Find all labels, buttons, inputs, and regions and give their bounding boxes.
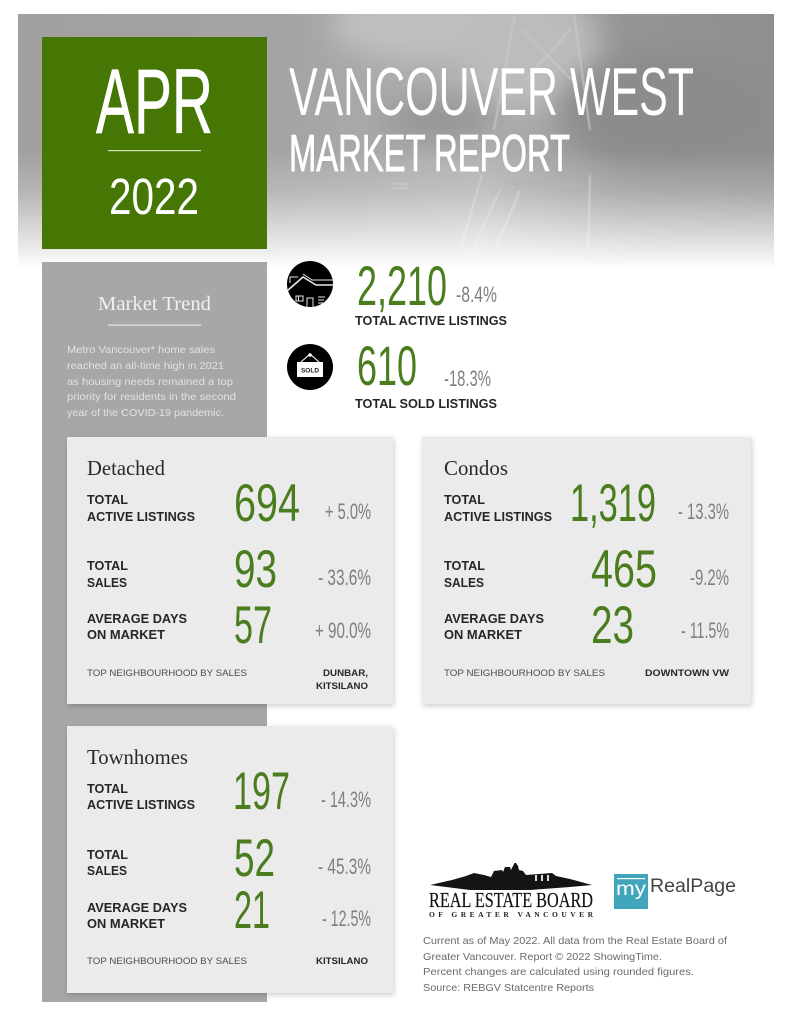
market trend paragraph: Metro Vancouver* home sales: [67, 344, 215, 356]
title: MARKET REPORT: [289, 125, 570, 183]
date box: Apr 2022: [42, 37, 267, 249]
header banner: foggy bridge photo: [18, 0, 780, 267]
townhomes days on market row: AVERAGE DAYS: [87, 901, 187, 915]
panel: condos: [422, 437, 751, 704]
market trend paragraph: [67, 344, 236, 419]
condos active listings row: TOTAL: [444, 493, 485, 507]
townhomes top neighbourhood: KITSILANO: [316, 956, 368, 967]
condos sales row: SALES: [444, 576, 484, 590]
townhomes sales row: - 45.3%: [318, 854, 371, 879]
townhomes top neighbourhood: [87, 956, 368, 967]
condos top neighbourhood: TOP NEIGHBOURHOOD BY SALES: [444, 668, 605, 679]
condos days on market row: [444, 596, 729, 655]
stat: total active listings: -8.4%: [456, 282, 497, 307]
logo: myRealPage: [614, 874, 736, 909]
detached days on market row: AVERAGE DAYS: [87, 612, 187, 626]
market trend paragraph: year of the COVID-19 pandemic.: [67, 407, 224, 419]
detached active listings row: 694: [234, 474, 300, 533]
detached days on market row: 57: [234, 596, 272, 655]
icon: house: [287, 261, 334, 308]
detached sales row: SALES: [87, 576, 127, 590]
condos days on market row: 23: [591, 596, 634, 655]
stat: total sold listings: 610: [357, 334, 417, 397]
condos top neighbourhood: DOWNTOWN VW: [645, 668, 729, 679]
date box: Apr 2022: APR: [96, 51, 213, 153]
logo: Real Estate Board of Greater Vancouver: OF GREATER VANCOUVER: [429, 910, 594, 919]
townhomes sales row: [87, 829, 371, 888]
logo: Real Estate Board of Greater Vancouver: REAL ESTATE BOARD: [429, 888, 593, 912]
sidebar: market trend panel: [42, 262, 267, 1002]
detached active listings row: + 5.0%: [325, 499, 371, 524]
detached sales row: TOTAL: [87, 559, 128, 573]
panel: detached: [67, 437, 393, 704]
footer source note: Current as of May 2022. All data from the Real Estate Board of: [423, 935, 727, 947]
logo: myRealPage: RealPage: [650, 876, 736, 897]
heading: market trend: Market Trend: [98, 293, 211, 315]
condos active listings row: ACTIVE LISTINGS: [444, 510, 552, 524]
stat: total sold listings: [355, 334, 497, 411]
condos top neighbourhood: [444, 668, 729, 679]
icon: sold sign: [287, 344, 333, 390]
condos sales row: -9.2%: [690, 565, 729, 590]
panel: townhomes: [67, 726, 393, 993]
stat: total sold listings: TOTAL SOLD LISTINGS: [355, 397, 497, 411]
townhomes active listings row: [87, 762, 371, 821]
detached sales row: [87, 540, 371, 599]
townhomes active listings row: 197: [233, 762, 290, 821]
condos active listings row: - 13.3%: [678, 499, 729, 524]
detached days on market row: + 90.0%: [315, 618, 371, 643]
stat: total sold listings: -18.3%: [444, 366, 491, 391]
heading: condos: Condos: [444, 456, 508, 480]
heading: townhomes: Townhomes: [87, 745, 188, 769]
heading: detached: Detached: [87, 456, 165, 480]
condos days on market row: ON MARKET: [444, 628, 522, 642]
townhomes days on market row: - 12.5%: [322, 906, 371, 931]
townhomes sales row: SALES: [87, 864, 127, 878]
footer source note: Greater Vancouver. Report © 2022 ShowingTime.: [423, 951, 662, 963]
detached sales row: - 33.6%: [318, 565, 371, 590]
logo: Real Estate Board of Greater Vancouver: [429, 863, 594, 919]
detached top neighbourhood: [87, 668, 368, 692]
condos sales row: TOTAL: [444, 559, 485, 573]
market trend paragraph: priority for residents in the second: [67, 391, 236, 403]
stat: total active listings: 2,210: [357, 254, 447, 317]
market trend paragraph: reached an all-time high in 2021: [67, 360, 224, 372]
townhomes active listings row: - 14.3%: [321, 787, 371, 812]
logo: myRealPage: my: [616, 879, 647, 900]
footer source note: [423, 935, 727, 994]
market trend paragraph: as housing needs remained a top: [67, 376, 233, 388]
icon: sold sign: SOLD: [301, 368, 319, 374]
detached days on market row: ON MARKET: [87, 628, 165, 642]
detached active listings row: TOTAL: [87, 493, 128, 507]
condos active listings row: [444, 474, 729, 533]
condos sales row: [444, 540, 729, 599]
townhomes days on market row: ON MARKET: [87, 917, 165, 931]
footer source note: Percent changes are calculated using rounded figures.: [423, 966, 694, 978]
condos sales row: 465: [591, 540, 657, 599]
townhomes active listings row: ACTIVE LISTINGS: [87, 798, 195, 812]
detached active listings row: [87, 474, 371, 533]
condos days on market row: AVERAGE DAYS: [444, 612, 544, 626]
townhomes sales row: 52: [234, 829, 275, 888]
detached active listings row: ACTIVE LISTINGS: [87, 510, 195, 524]
stat: total active listings: TOTAL ACTIVE LISTINGS: [355, 314, 507, 328]
detached top neighbourhood: DUNBAR,: [323, 668, 368, 679]
title: [289, 54, 694, 183]
condos active listings row: 1,319: [570, 474, 656, 533]
townhomes active listings row: TOTAL: [87, 782, 128, 796]
townhomes sales row: TOTAL: [87, 848, 128, 862]
detached top neighbourhood: TOP NEIGHBOURHOOD BY SALES: [87, 668, 247, 679]
footer source note: Source: REBGV Statcentre Reports: [423, 982, 594, 994]
detached days on market row: [87, 596, 371, 655]
detached top neighbourhood: KITSILANO: [316, 681, 368, 692]
townhomes top neighbourhood: TOP NEIGHBOURHOOD BY SALES: [87, 956, 247, 967]
condos days on market row: - 11.5%: [681, 618, 729, 643]
date box: Apr 2022: 2022: [109, 168, 199, 225]
townhomes days on market row: [87, 881, 371, 940]
townhomes days on market row: 21: [234, 881, 270, 940]
detached sales row: 93: [234, 540, 277, 599]
